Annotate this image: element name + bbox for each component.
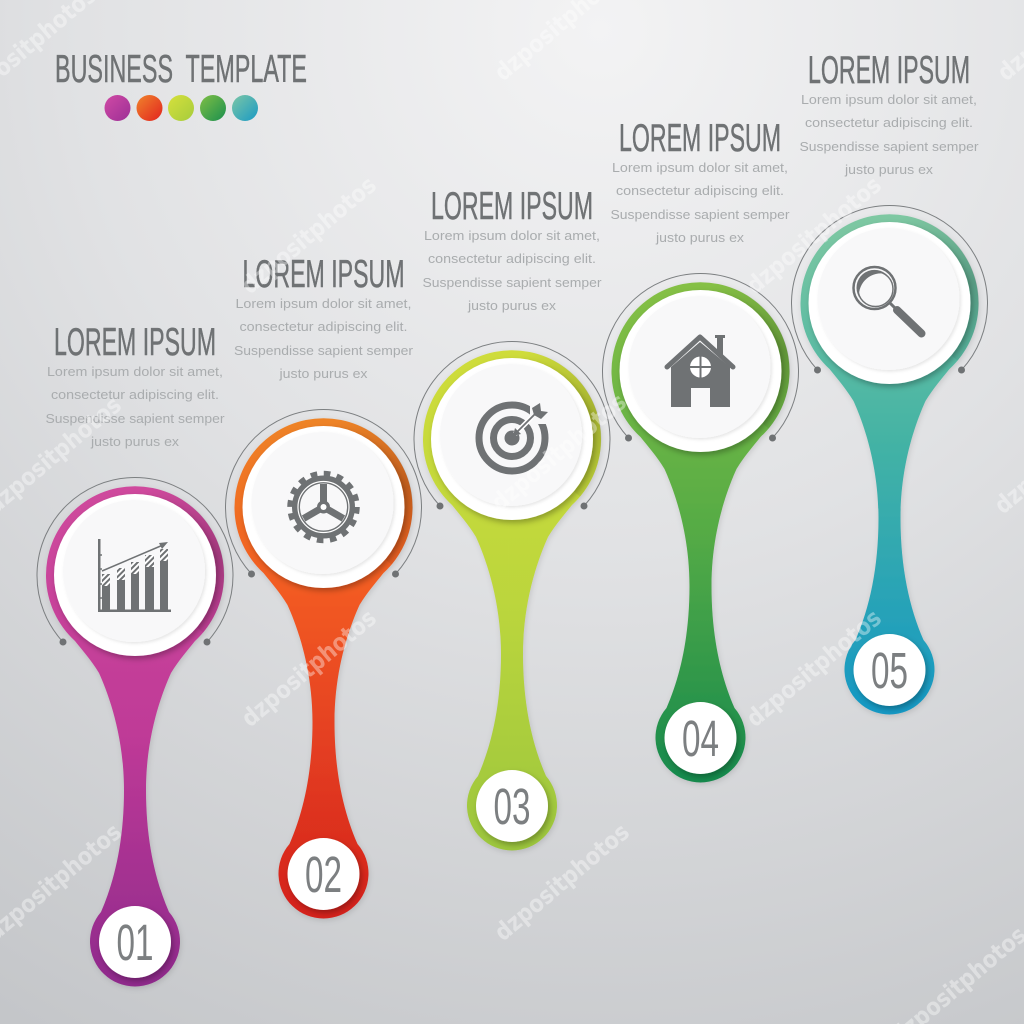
text block 05: Suspendisse sapient semper [800, 139, 979, 154]
text block 05: consectetur adipiscing elit. [805, 115, 973, 130]
text block 04: LOREM IPSUM [619, 117, 781, 160]
text block 01 [46, 321, 225, 449]
icon: magnifier [854, 267, 922, 334]
drop shape 03 [414, 342, 610, 850]
title: BUSINESS TEMPLATE [55, 48, 307, 91]
step 4 [602, 117, 798, 782]
drop shape 02 [226, 410, 422, 918]
text block 01: consectetur adipiscing elit. [51, 387, 219, 402]
text block 04: Lorem ipsum dolor sit amet, [612, 160, 788, 175]
text block 01: Suspendisse sapient semper [46, 411, 225, 426]
step 3 [414, 185, 610, 850]
icon: gear [290, 474, 356, 540]
drop shape 04 [602, 274, 798, 782]
colour dots legend [104, 95, 258, 121]
text block 01: LOREM IPSUM [54, 321, 216, 364]
text block 02: Lorem ipsum dolor sit amet, [236, 296, 412, 311]
icon: bar chart [98, 539, 171, 612]
icon: house [667, 335, 733, 407]
drop shape 01: 01 [116, 914, 154, 971]
text block 04: justo purus ex [655, 230, 745, 245]
text block 01: Lorem ipsum dolor sit amet, [47, 364, 223, 379]
drop shape 01 [37, 478, 233, 986]
text block 04: Suspendisse sapient semper [610, 207, 790, 222]
text block 02: justo purus ex [278, 366, 368, 381]
text block 01: justo purus ex [90, 434, 180, 449]
step 1 [37, 321, 233, 986]
icon: target [479, 402, 552, 471]
text block 05 [800, 49, 979, 177]
watermarks: dzpositphotos [486, 388, 632, 517]
drop shape 04: 04 [682, 710, 719, 767]
text block 03: LOREM IPSUM [431, 185, 593, 228]
text block 04: consectetur adipiscing elit. [616, 183, 784, 198]
drop shape 05 [792, 206, 988, 714]
step 5 [792, 49, 988, 714]
text block 02 [234, 253, 414, 381]
text block 03: consectetur adipiscing elit. [428, 251, 596, 266]
text block 04 [610, 117, 790, 245]
text block 03: Suspendisse sapient semper [422, 275, 602, 290]
text block 02: consectetur adipiscing elit. [240, 319, 408, 334]
drop shape 05: 05 [871, 642, 908, 699]
watermarks: dzpositphotos [236, 604, 382, 733]
text block 02: LOREM IPSUM [242, 253, 404, 296]
drop shape 02: 02 [305, 846, 342, 903]
text block 05: justo purus ex [844, 162, 934, 177]
text block 03: justo purus ex [467, 298, 557, 313]
step 2 [226, 253, 422, 918]
text block 03: Lorem ipsum dolor sit amet, [424, 228, 600, 243]
watermarks: dzpositphotos [236, 171, 382, 300]
drop shape 03: 03 [494, 778, 530, 835]
watermarks: dzpositphotos [741, 604, 887, 733]
watermarks: dzpositphotos [741, 171, 887, 300]
watermarks: dzpositphotos [489, 818, 635, 947]
text block 02: Suspendisse sapient semper [234, 343, 414, 358]
text block 05: Lorem ipsum dolor sit amet, [801, 92, 977, 107]
text block 03 [422, 185, 602, 313]
